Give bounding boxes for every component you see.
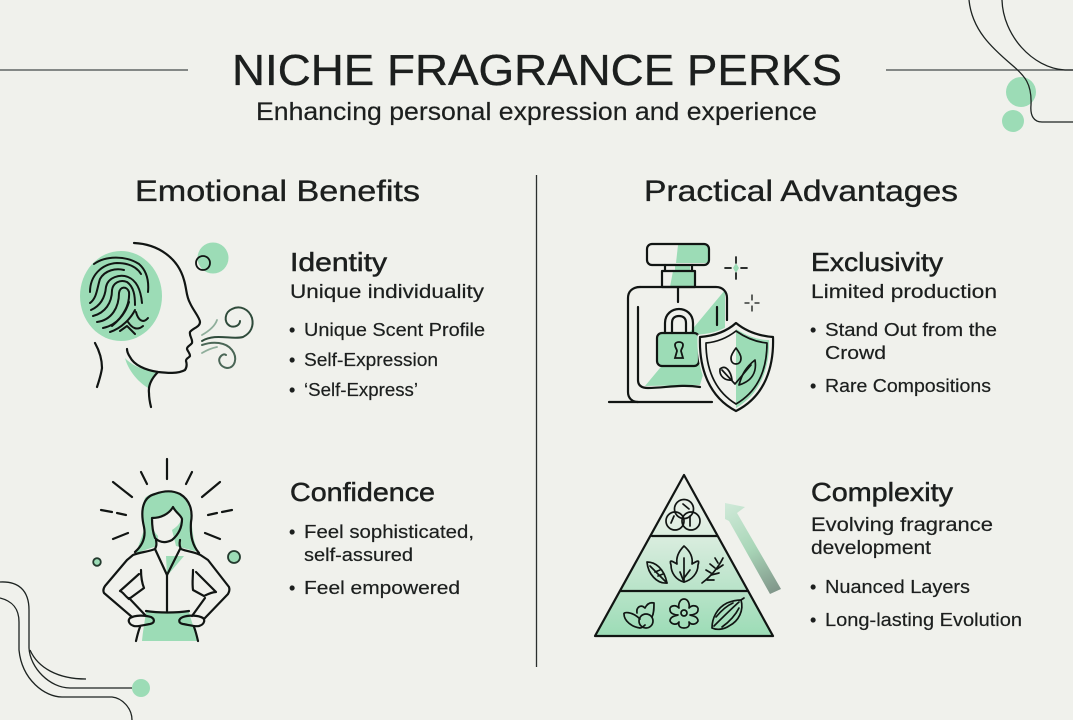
text: exclusivity: • [810,376,816,396]
text: identity: Unique individuality [290,282,485,303]
text: confidence: Feel empowered [304,577,460,598]
title: NICHE FRAGRANCE PERKS [232,46,842,95]
title rule left [0,69,188,71]
text: exclusivity [810,247,997,396]
text: identity: • [289,320,295,340]
text: identity [289,247,485,400]
text: identity: Unique Scent Profile [304,319,485,340]
text: identity: • [289,380,295,400]
text: confidence: Confidence [290,477,435,507]
subtitle: Enhancing personal expression and experience [256,98,817,126]
text: complexity: Evolving fragrance [811,515,993,536]
text: confidence: • [289,522,295,542]
text: identity: • [289,350,295,370]
text: identity: ‘Self-Express’ [304,379,418,400]
text: confidence: • [289,578,295,598]
text: exclusivity: Limited production [811,282,997,303]
arrow [725,503,781,594]
heading: emotional benefits: Emotional Benefits [135,175,420,208]
icon: confident woman [93,459,240,641]
heart notes [647,562,667,583]
text: complexity: • [810,577,816,597]
text: confidence [289,477,474,598]
column divider [536,175,538,667]
decoration: bottom left lines and dot [0,582,150,720]
sparkles [733,263,739,273]
text: complexity [810,477,1022,630]
breath swirls [202,307,253,368]
icon: perfume bottle with lock and shield [609,244,773,411]
decoration: top right lines and dots [886,0,1073,132]
text: exclusivity: Rare Compositions [825,375,991,396]
icon: head with fingerprint [80,242,253,407]
icon: fragrance pyramid [595,475,781,636]
heading: practical advantages: Practical Advantages [644,175,958,208]
text: exclusivity: Exclusivity [811,247,943,277]
text: complexity: Complexity [811,477,953,507]
top notes [674,500,694,518]
text: complexity: • [810,610,816,630]
fingerprint ridges [90,258,148,334]
text: complexity: development [811,538,932,559]
text: confidence: Feel sophisticated, [304,521,474,542]
text: confidence: self-assured [304,544,413,565]
text: exclusivity: • [810,320,816,340]
text: complexity: Long-lasting Evolution [825,609,1022,630]
text: identity: Identity [290,247,387,277]
text: exclusivity: Stand Out from the [825,319,997,340]
text: complexity: Nuanced Layers [825,576,970,597]
text: identity: Self-Expression [304,349,438,370]
text: exclusivity: Crowd [825,342,886,363]
base notes [624,613,645,628]
